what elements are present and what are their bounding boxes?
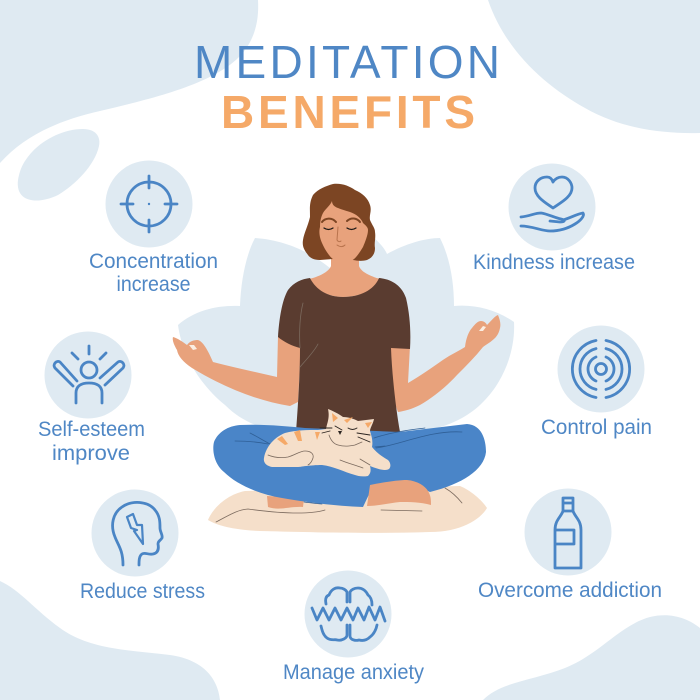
icon: bottle [524,488,612,576]
shirt [278,278,410,432]
icon: brain with wave [304,570,392,658]
icon: concentric rings [558,326,644,412]
title line: meditation: MEDITATION [194,36,500,88]
item: self-esteem improve [38,332,145,465]
background blob: top right [488,0,700,133]
label: Kindness increase [473,251,635,274]
label: increase [116,273,190,296]
cat [264,409,390,476]
label: improve [52,442,130,465]
title [194,36,500,138]
nose and mouth [337,227,345,246]
item: reduce stress [80,490,205,603]
background blob: small left [18,129,99,201]
face [319,201,368,262]
item: concentration increase [89,160,218,296]
background blob: bottom right [483,615,700,700]
cat face and outlines [268,435,370,468]
label: Reduce stress [80,580,205,603]
label [89,250,218,296]
legs [213,424,486,507]
icon: head with lightning bolt [92,490,178,576]
item: kindness increase [473,164,635,274]
label [38,418,145,465]
label: Control pain [541,416,652,439]
label: Concentration [89,250,218,273]
neck [309,250,380,297]
hand highlights [189,326,486,350]
cushion [208,486,487,533]
item: manage anxiety [283,570,424,684]
woman figure [173,184,500,533]
icon: crosshair target [106,160,192,248]
left foot [267,496,304,509]
item: control pain [541,326,652,439]
icon: person with raised arms [44,332,132,418]
cat stripes and ears [277,413,372,445]
background blob: top left [0,0,258,163]
right arm [386,315,500,412]
hair [303,184,375,261]
label: Manage anxiety [283,661,424,684]
eyebrows and eyes [322,218,360,222]
title line: benefits: BENEFITS [221,86,475,138]
label: Self-esteem [38,418,145,441]
item: overcome addiction [478,488,662,602]
label: Overcome addiction [478,579,662,602]
background blob: bottom left [0,581,220,700]
icon: heart in hand [508,164,596,250]
cat body and head [264,409,390,476]
right foot [367,480,431,506]
lotus backdrop [178,237,514,432]
left arm [173,336,301,406]
